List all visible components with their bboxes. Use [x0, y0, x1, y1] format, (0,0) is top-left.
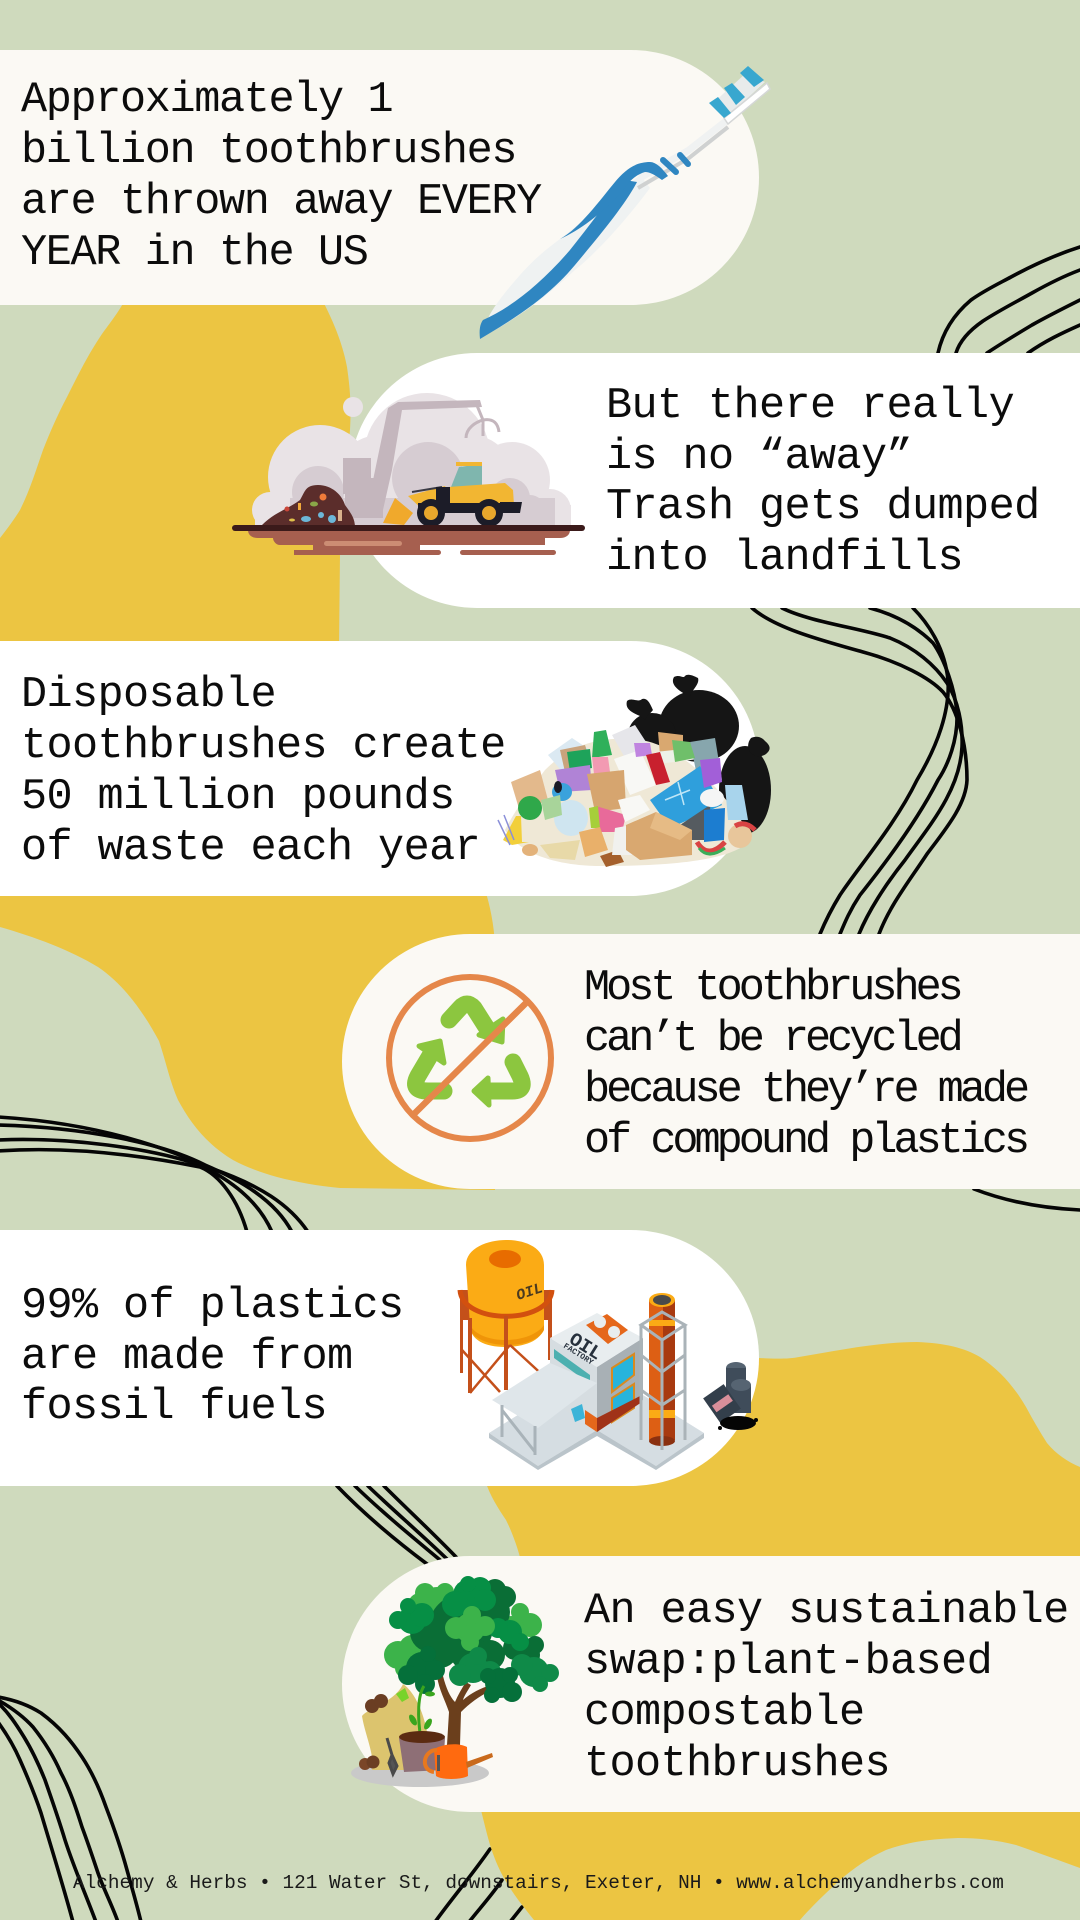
trowel	[387, 1738, 397, 1774]
text block 3	[21, 671, 506, 873]
text block 4: Most toothbrushes	[584, 964, 961, 1013]
text block 2: into landfills	[606, 534, 963, 583]
compost sack	[362, 1684, 428, 1770]
excavator silhouette	[290, 442, 555, 527]
watering can	[425, 1744, 493, 1779]
footer contact line: Alchemy & Herbs • 121 Water St, downstairs, Exeter, NH • www.alchemyandherbs.com	[73, 1872, 1004, 1894]
panel shape 1	[0, 50, 759, 305]
text block 1: billion toothbrushes	[21, 127, 516, 176]
text block 1: Approximately 1	[21, 76, 392, 125]
panel shape 2	[349, 353, 1080, 608]
text block 5: are made from	[21, 1333, 353, 1382]
text block 4: because they’re made	[584, 1066, 1028, 1115]
text block 4	[584, 964, 1028, 1166]
panel shape 6	[342, 1556, 1080, 1812]
plant pot	[399, 1738, 445, 1772]
icon: toothbrush	[480, 66, 770, 339]
factory building: FACTORY	[561, 1342, 595, 1367]
text block 1	[21, 76, 542, 278]
icon: landfill with loader	[232, 393, 585, 555]
text block 2	[606, 382, 1040, 583]
seedling	[419, 1686, 424, 1740]
text block 6: swap:plant-based	[584, 1638, 992, 1687]
panel shape 4	[342, 934, 1080, 1189]
smoke cloud	[252, 393, 571, 531]
oil tank	[460, 1240, 552, 1393]
yellow blob: bottom right	[480, 1806, 1080, 1920]
factory sign: OIL	[565, 1328, 605, 1365]
panel 4: recycling	[342, 934, 1080, 1189]
text block 4: can’t be recycled	[584, 1015, 961, 1064]
factory building	[550, 1313, 643, 1432]
panel 5: fossil fuels	[0, 1230, 759, 1486]
tree trunk	[437, 1676, 492, 1745]
ground	[248, 530, 570, 555]
panel 2: landfills	[232, 353, 1080, 608]
icon: oil factory	[460, 1240, 758, 1470]
text block 1: YEAR in the US	[21, 229, 368, 278]
text block 3: 50 million pounds	[21, 773, 455, 822]
text block 6: compostable	[584, 1689, 865, 1738]
icon: no recycling	[389, 977, 551, 1139]
icon: tree and gardening set	[351, 1576, 559, 1787]
text block 2: is no “away”	[606, 433, 912, 482]
seed nuts	[359, 1758, 371, 1770]
tank label: OIL	[514, 1280, 545, 1305]
text block 3: of waste each year	[21, 824, 480, 873]
panel shape 5	[0, 1230, 759, 1486]
text block 2: But there really	[606, 382, 1014, 431]
text block 3: toothbrushes create	[21, 722, 506, 771]
panel 3: waste	[0, 641, 771, 896]
panel shape 3	[0, 641, 759, 896]
text block 2: Trash gets dumped	[606, 483, 1040, 532]
yellow blob: upper left	[0, 296, 351, 650]
trash heap	[262, 485, 355, 527]
icon: trash pile	[498, 675, 771, 867]
text block 3: Disposable	[21, 671, 276, 720]
wheel loader	[383, 462, 522, 527]
text block 6: toothbrushes	[584, 1740, 890, 1789]
yellow blob: right	[480, 1342, 1080, 1565]
text block 6: An easy sustainable	[584, 1587, 1069, 1636]
panel 6: sustainable swap	[342, 1556, 1080, 1812]
oil barrels	[703, 1362, 758, 1430]
panel 1: thrown away	[0, 50, 770, 339]
canopy	[492, 1363, 597, 1428]
text block 4: of compound plastics	[584, 1117, 1027, 1166]
text block 5: 99% of plastics	[21, 1282, 404, 1331]
base platform	[489, 1395, 704, 1466]
text block 6	[584, 1587, 1069, 1789]
text block 1: are thrown away EVERY	[21, 178, 542, 227]
text block 5	[21, 1282, 404, 1432]
tree crown	[384, 1576, 559, 1703]
chimney	[641, 1293, 685, 1450]
text block 5: fossil fuels	[21, 1383, 327, 1432]
yellow blob: mid left	[0, 890, 495, 1190]
